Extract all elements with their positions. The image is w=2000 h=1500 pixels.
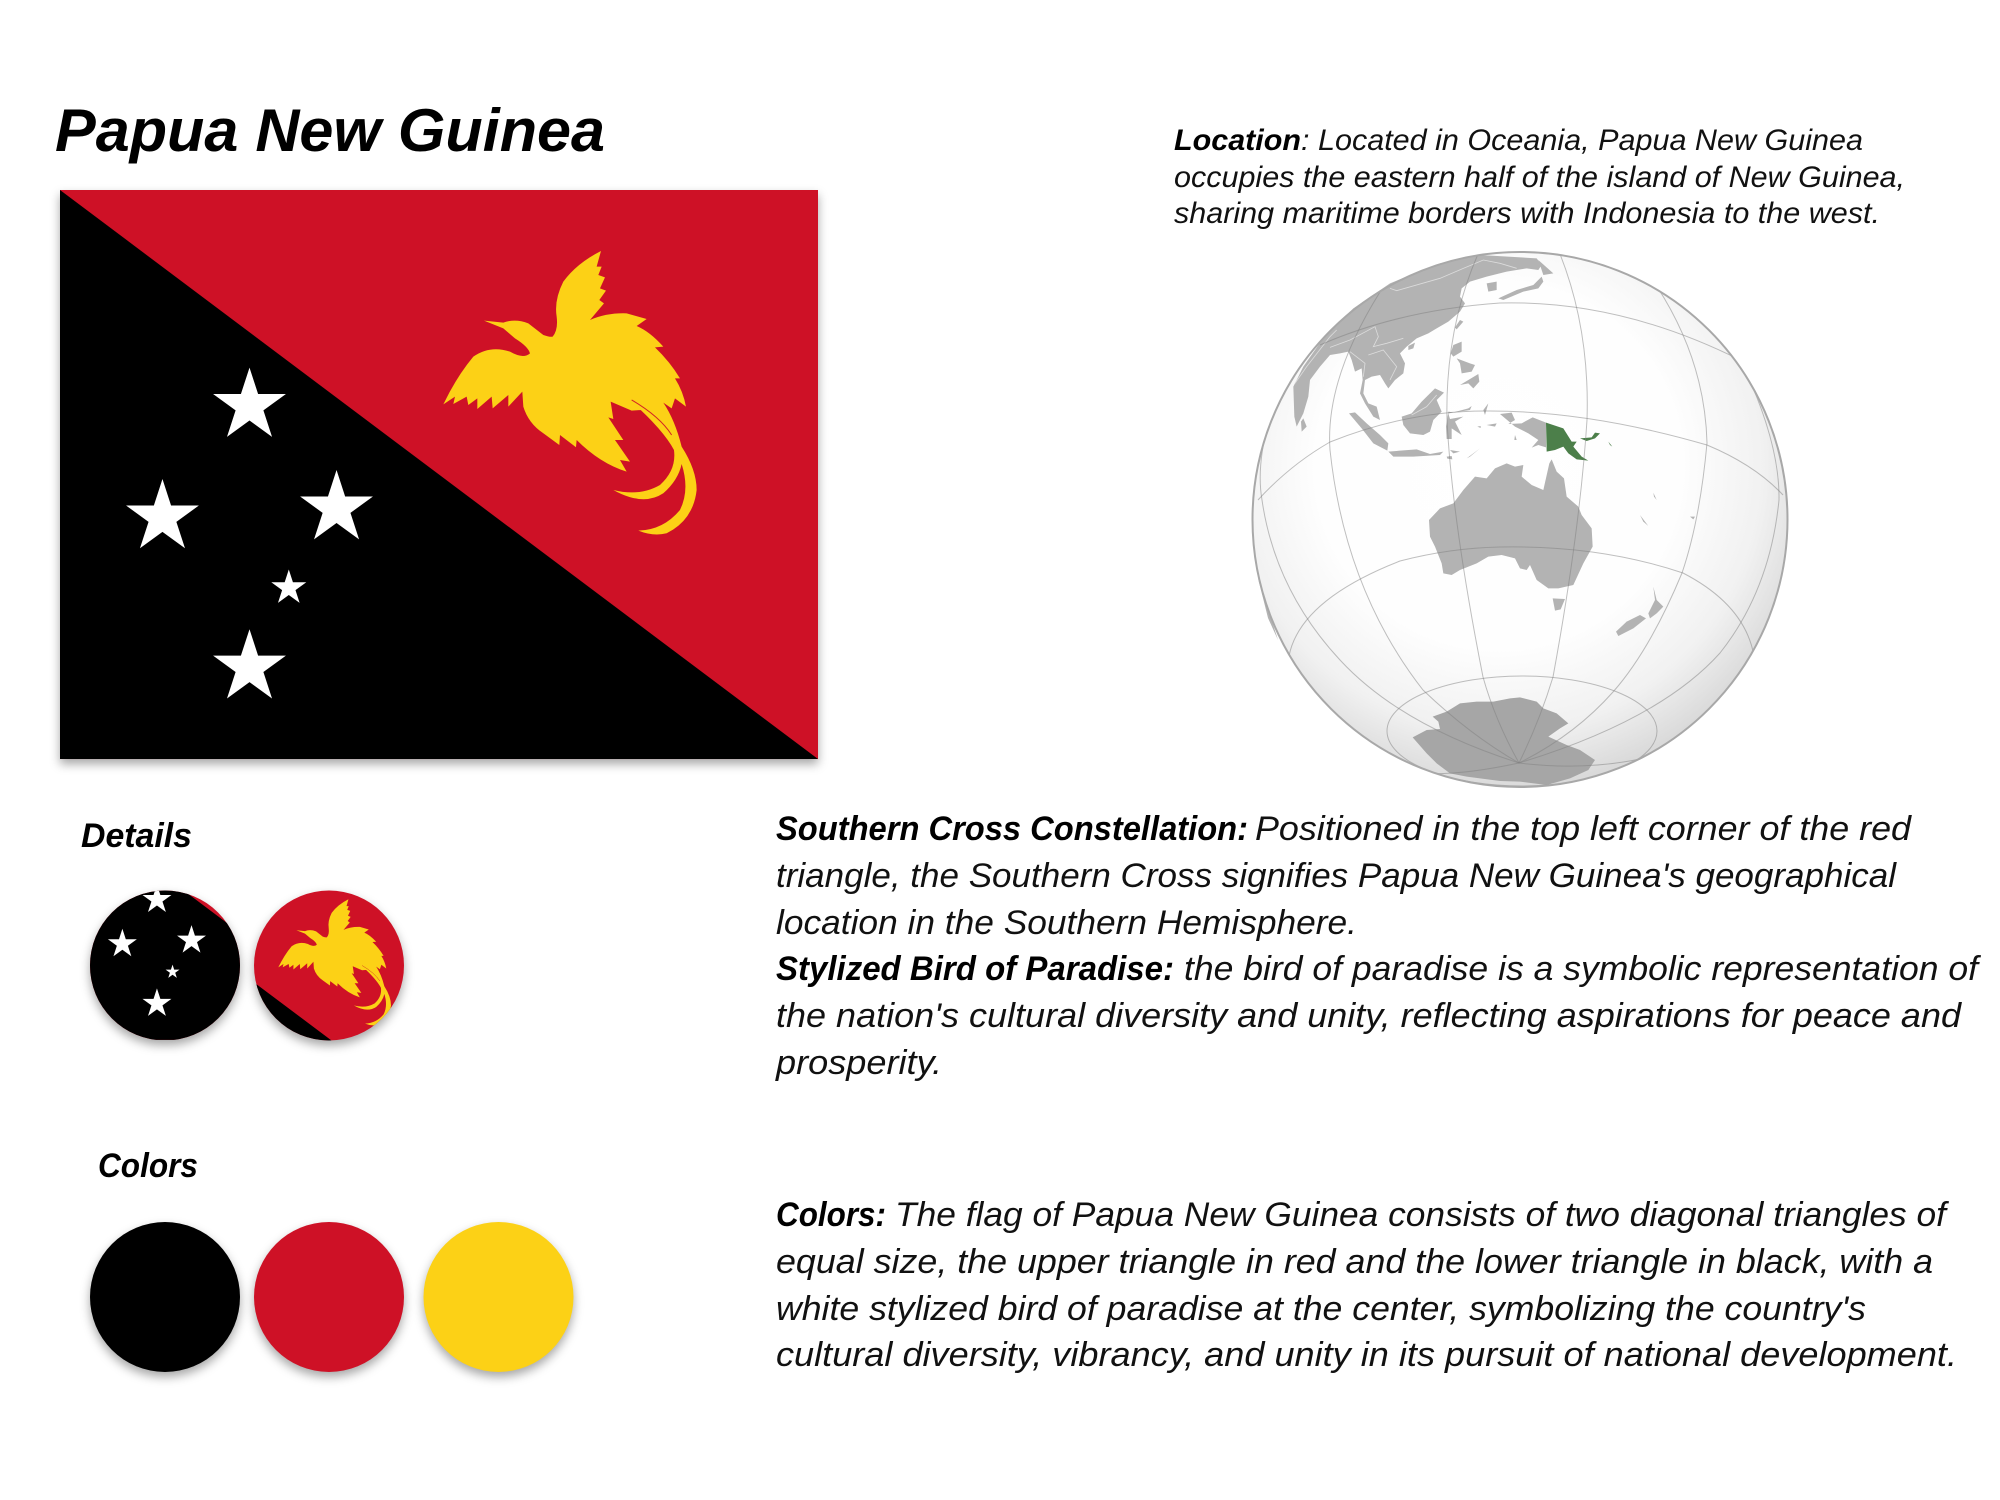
- details text block: location in the Southern Hemisphere.: [776, 904, 1357, 942]
- graticule: [1258, 254, 1783, 786]
- heading: details: Details: [81, 817, 192, 855]
- land: Asia: [1293, 255, 1553, 459]
- details text block: Positioned in the top left corner of the red: [1255, 810, 1912, 848]
- colors text block: cultural diversity, vibrancy, and unity in its pursuit of national development.: [776, 1336, 1957, 1374]
- details text block: triangle, the Southern Cross signifies Papua New Guinea's geographical: [776, 857, 1897, 895]
- detail circle: bird of paradise: [248, 890, 410, 1052]
- globe map showing Papua New Guinea: [1252, 252, 1788, 787]
- details text block: Stylized Bird of Paradise:: [776, 950, 1174, 988]
- flag of Papua New Guinea: [60, 190, 818, 759]
- land: Antarctica: [1413, 697, 1595, 785]
- land: Australia and Pacific: [1429, 413, 1695, 636]
- detail circle: Southern Cross: [84, 890, 246, 1052]
- heading: colors: Colors: [98, 1147, 198, 1185]
- location text block: : Located in Oceania, Papua New Guinea: [1301, 124, 1863, 157]
- details text block: the nation's cultural diversity and unity, reflecting aspirations for peace and: [776, 997, 1962, 1035]
- location text block: sharing maritime borders with Indonesia to the west.: [1174, 197, 1880, 230]
- location text block: occupies the eastern half of the island of New Guinea,: [1174, 161, 1905, 194]
- colors text block: [776, 1196, 1957, 1374]
- color swatches: [90, 1222, 574, 1372]
- Papua New Guinea highlight: [1546, 423, 1612, 461]
- details text block: prosperity.: [775, 1044, 942, 1082]
- colors text block: white stylized bird of paradise at the center, symbolizing the country's: [776, 1290, 1866, 1328]
- colors text block: The flag of Papua New Guinea consists of two diagonal triangles of: [895, 1196, 1950, 1234]
- land: South America sliver: [1258, 578, 1278, 640]
- details text block: Southern Cross Constellation:: [776, 810, 1248, 848]
- details text block: the bird of paradise is a symbolic representation of: [1184, 950, 1982, 988]
- location text block: Location: [1174, 124, 1301, 157]
- title: Papua New Guinea: [55, 97, 605, 164]
- location text block: [1174, 124, 1905, 230]
- colors text block: Colors:: [776, 1196, 886, 1234]
- details text block: [775, 810, 1982, 1082]
- colors text block: equal size, the upper triangle in red and the lower triangle in black, with a: [776, 1243, 1933, 1281]
